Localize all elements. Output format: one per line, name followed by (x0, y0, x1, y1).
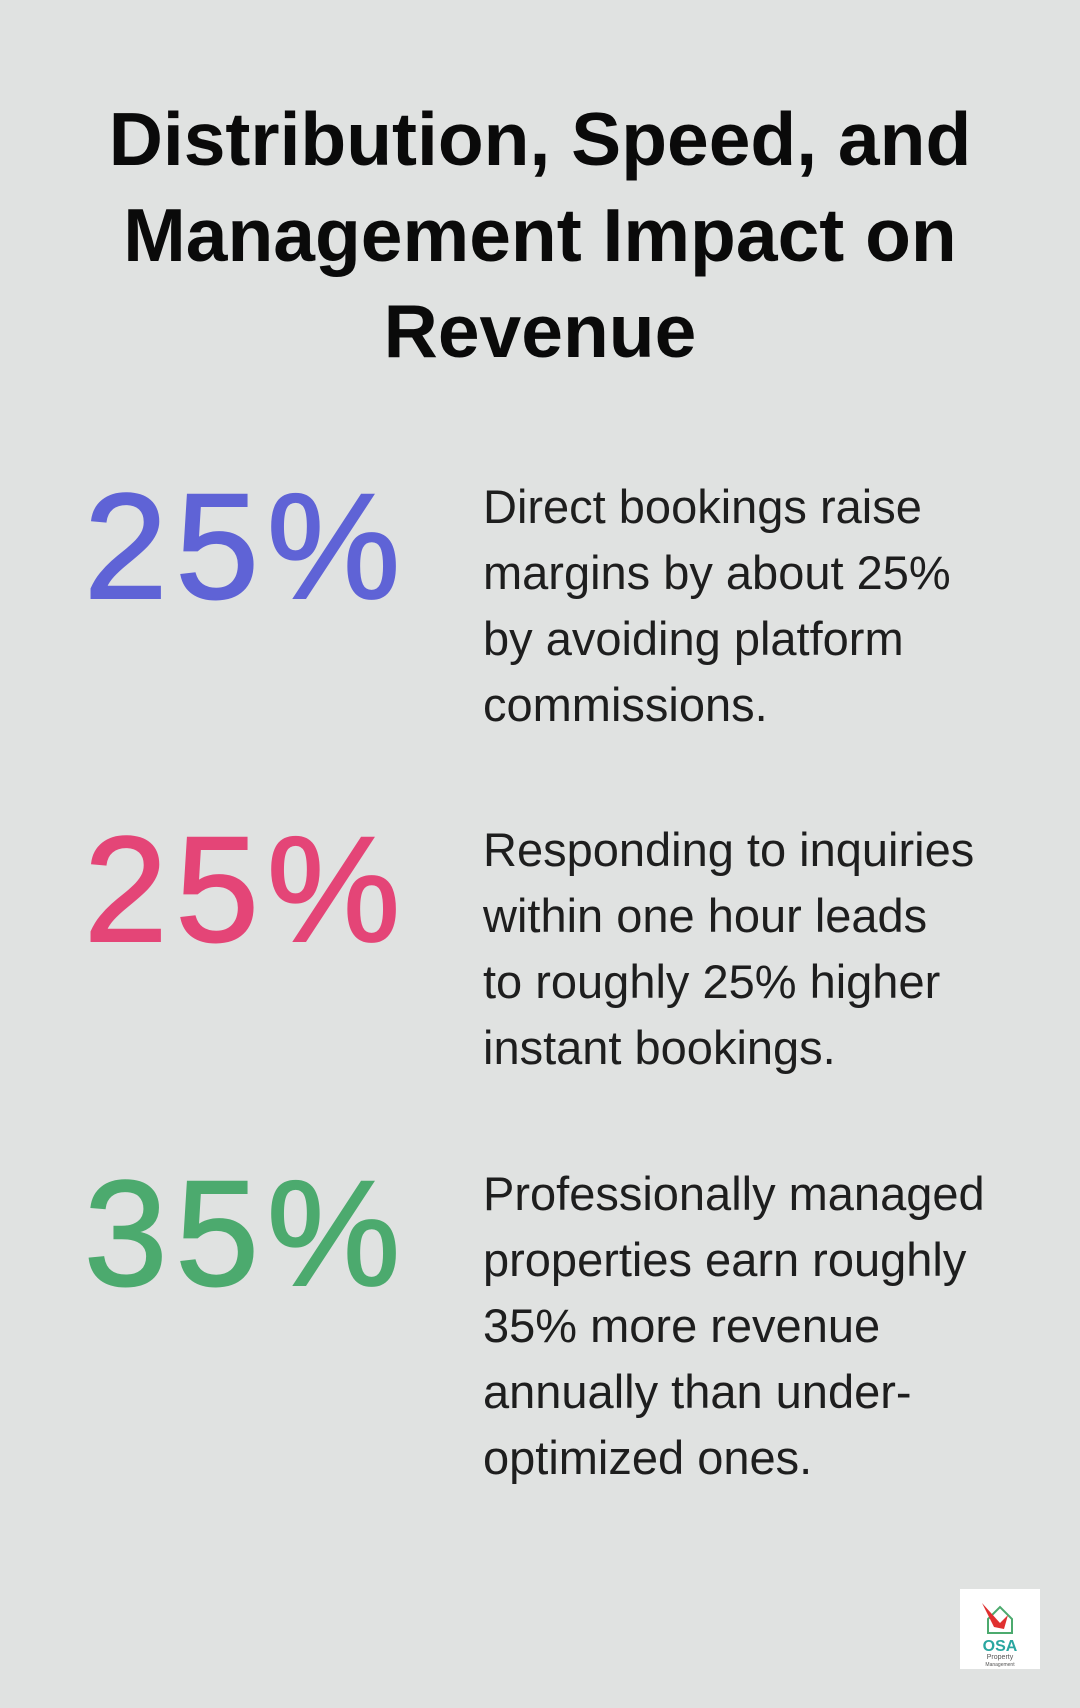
icon: house and bird: Property (987, 1654, 1014, 1661)
stat 2 number: 25% (84, 805, 408, 973)
stat 2 text: instant bookings. (483, 1021, 836, 1074)
stat 2 text: Responding to inquiries (483, 823, 974, 876)
stat 3 text: 35% more revenue (483, 1299, 880, 1352)
stat 1 text: Direct bookings raise (483, 480, 922, 533)
logo (960, 1589, 1040, 1669)
title (109, 97, 971, 373)
stat 1 number: 25% (84, 462, 408, 630)
stat 1 text: margins by about 25% (483, 546, 951, 599)
stat 1 text: by avoiding platform (483, 612, 904, 665)
stat 1 text: commissions. (483, 678, 768, 731)
icon: house and bird: Management (985, 1662, 1015, 1668)
stat 3 text: optimized ones. (483, 1431, 812, 1484)
stat 2 text: within one hour leads (483, 889, 927, 942)
stat 3 text: properties earn roughly (483, 1233, 966, 1286)
stat 1 text (483, 480, 951, 731)
stat 2 text (483, 823, 974, 1074)
title: Distribution, Speed, and (109, 97, 971, 181)
stat 3 number: 35% (84, 1149, 408, 1317)
stat 2 text: to roughly 25% higher (483, 955, 940, 1008)
stat 3 text: Professionally managed (483, 1167, 985, 1220)
icon: house and bird (982, 1603, 1018, 1668)
icon: house and bird: OSA (983, 1638, 1018, 1655)
stat 3 text: annually than under- (483, 1365, 912, 1418)
stat 3 text (483, 1167, 985, 1484)
title: Revenue (384, 289, 696, 373)
title: Management Impact on (123, 193, 957, 277)
